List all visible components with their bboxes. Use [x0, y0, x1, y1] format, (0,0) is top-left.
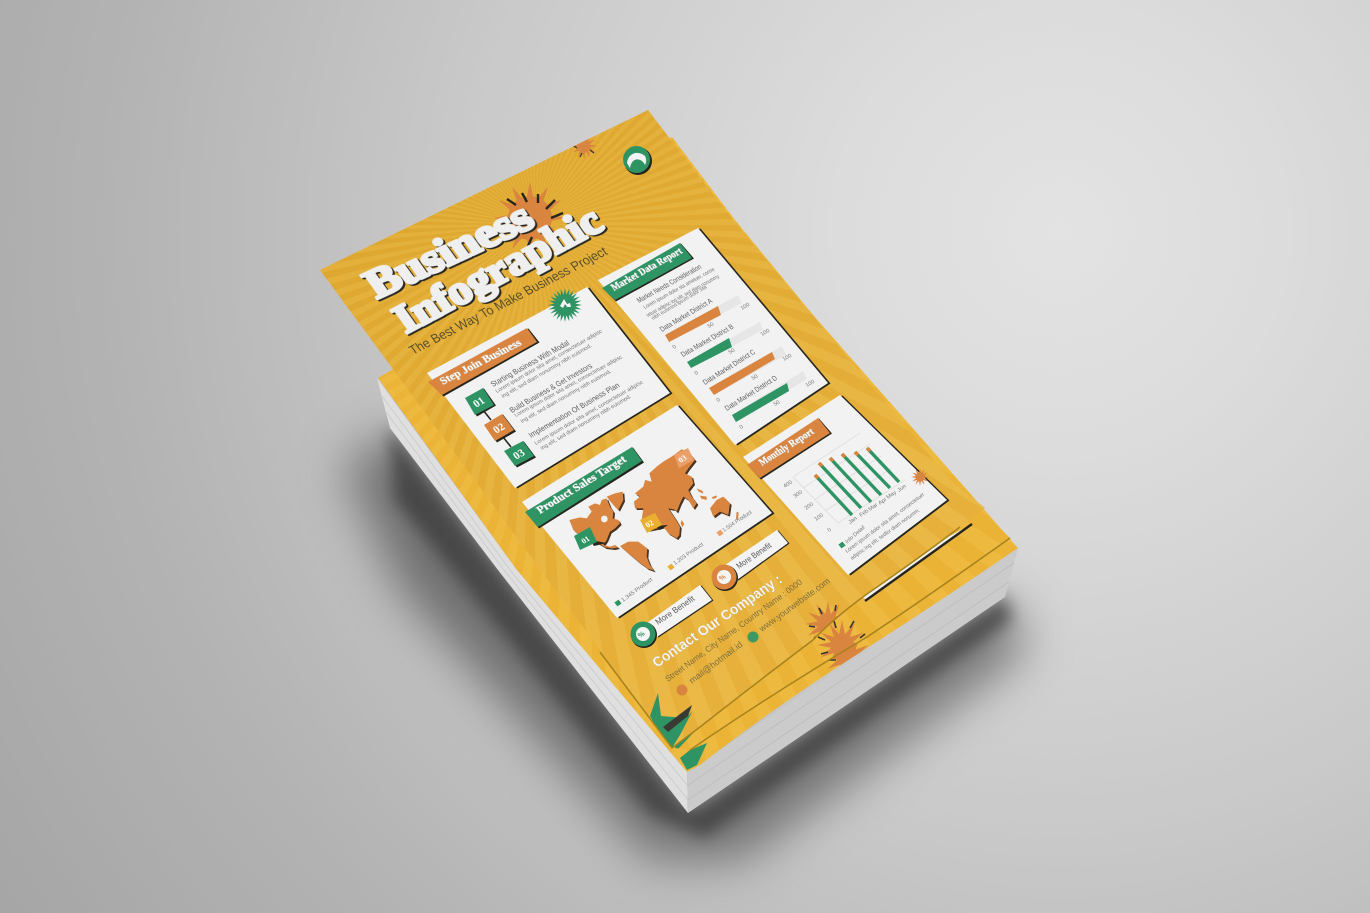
map marker 03	[674, 448, 694, 468]
step 3 text: Implementation Of Business Plan	[527, 381, 621, 440]
step 2 text: Lorem ipsum dolor sita amet, consectetuer adipisc	[514, 355, 624, 419]
sheet 2 (middle sheet)	[670, 137, 1010, 750]
bar: district A: 100	[740, 302, 751, 312]
chart legend and note: Info Detail	[845, 525, 866, 545]
map marker 02	[640, 513, 668, 533]
step 3 text: Lorem ipsum dolor sita amet, consectetuer adipisc	[534, 380, 645, 447]
bar chart: monthly: 300	[793, 490, 804, 500]
button: more benefit orange	[712, 530, 790, 591]
bar: district C: 0	[716, 397, 722, 404]
panel: step join business	[427, 284, 672, 488]
bar chart: monthly: Jan	[848, 516, 859, 526]
step 03: 03	[511, 447, 528, 462]
chart legend and note: Lorem ipsum dolor sita amet, consectetuer	[845, 492, 926, 555]
map legend: 1.504 Product	[722, 510, 754, 534]
bar chart: monthly: 200	[804, 502, 815, 512]
bar: district B	[679, 322, 771, 377]
header ribbon: product sales target	[525, 447, 644, 528]
orange starburst bottom right	[805, 601, 851, 647]
chart legend and note: adipisc ing elit, sedlor diam nonumm.	[850, 507, 922, 562]
map marker 01: 01	[579, 534, 592, 546]
step 1 text: ing elit, sed diam nonummy nibh euismod.	[501, 343, 594, 400]
sheet 3 (bottom visible sheet)	[378, 309, 1018, 772]
bar chart: monthly: 100	[814, 513, 825, 523]
title: Infographic	[384, 198, 611, 342]
step 02	[484, 414, 516, 442]
step 01	[465, 388, 496, 416]
bar chart: monthly	[783, 433, 908, 534]
intro text	[635, 262, 721, 322]
map legend: 1.345 Product	[621, 577, 654, 604]
panel: market data report	[598, 228, 830, 446]
bar chart: monthly: Jun	[897, 484, 908, 494]
small starburst top	[573, 138, 596, 158]
button: more benefit green	[630, 585, 714, 648]
bar: district C: 50	[751, 374, 760, 382]
bar chart: monthly: Apr	[878, 497, 888, 507]
contact block: Street Name, City Name, Country Name : 0000	[663, 577, 804, 684]
header ribbon: market data report: Market Data Report	[609, 246, 685, 293]
map legend: 1.203 Product	[673, 542, 705, 567]
step 01: 01	[471, 395, 488, 410]
contact block: mail@hotmail.id	[687, 639, 744, 686]
step 03	[504, 441, 536, 468]
bar chart: monthly: 0	[827, 527, 833, 534]
button: more benefit green: %	[637, 630, 647, 640]
bar: district B: 50	[728, 348, 737, 356]
map legend	[614, 510, 754, 606]
step 1 text: Starting Business With Modal	[489, 339, 571, 389]
header ribbon: monthly report	[747, 418, 832, 480]
map marker 01	[574, 527, 607, 550]
step 2 text: ing elit, sed diam nonummy nibh euismod.	[520, 369, 613, 425]
button: more benefit orange: %	[718, 573, 728, 583]
bar: district D: 100	[805, 379, 816, 389]
intro text: Lorem ipsum dolor sta ametuer, conse	[643, 267, 716, 311]
bar: district C	[701, 346, 793, 404]
contact block: www.yourwebsite.com	[756, 576, 832, 634]
title: Business	[356, 195, 543, 307]
bar: district D: 50	[773, 400, 782, 408]
header ribbon: step join business: Step Join Business	[438, 337, 525, 387]
bar: district B: 0	[694, 370, 700, 377]
button: more benefit green: More Benefit	[653, 593, 697, 627]
bar: district A	[658, 295, 751, 351]
bar chart: monthly: 400	[783, 480, 794, 490]
step connector line	[483, 410, 511, 447]
intro text: nibh euismod ipsum dolor sita	[651, 284, 709, 322]
bar: district D	[723, 371, 816, 431]
bar: district B: 100	[760, 328, 771, 338]
bar: district A: 50	[707, 322, 716, 330]
step 2 text: Build Business & Get Investors	[508, 362, 594, 415]
panel: product sales target	[522, 405, 774, 618]
small starburst on card corner	[911, 468, 929, 486]
intro text: Market Needs Consideration	[635, 262, 703, 305]
bar: district D: 0	[739, 424, 745, 431]
bar: district B: Data Market District B	[679, 322, 736, 359]
bar chart: monthly: Mar	[868, 502, 879, 513]
green starburst badge	[548, 288, 582, 322]
map marker 02: 02	[643, 518, 656, 530]
button: more benefit orange: More Benefit	[734, 540, 774, 571]
logo badge	[623, 146, 652, 175]
green starburst bottom left	[650, 693, 692, 748]
intro text: tetuer adipisc ing elit, sed diam nonummy	[646, 274, 721, 319]
header ribbon: step join business	[428, 328, 540, 396]
sheet 1 (top flyer)	[320, 110, 985, 747]
contact block: Contact Our Company :	[649, 571, 786, 671]
bar chart: monthly: Feb	[859, 508, 870, 519]
header ribbon: monthly report: Monthly Report	[757, 427, 817, 468]
map marker 03: 03	[676, 453, 689, 465]
panel: monthly report	[743, 395, 950, 576]
world map	[569, 449, 739, 572]
subtitle: The Best Way To Make Business Project	[406, 244, 610, 357]
bar: district C: 100	[782, 353, 793, 363]
bar: district A: 0	[672, 344, 678, 351]
step 1 text: Lorem ipsum dolor sita amet, consectetuer adipisc	[495, 329, 604, 395]
step 3 text: ing elit, sed diam nonummy nibh euismod.	[540, 394, 633, 452]
starburst behind title	[494, 182, 564, 249]
bar: district D: Data Market District D	[723, 373, 779, 413]
header ribbon: product sales target: Product Sales Target	[534, 454, 629, 516]
bar: district A: Data Market District A	[658, 296, 714, 334]
bar chart: monthly: May	[886, 490, 898, 501]
bar: district C: Data Market District C	[701, 347, 757, 387]
step 02: 02	[491, 421, 508, 436]
